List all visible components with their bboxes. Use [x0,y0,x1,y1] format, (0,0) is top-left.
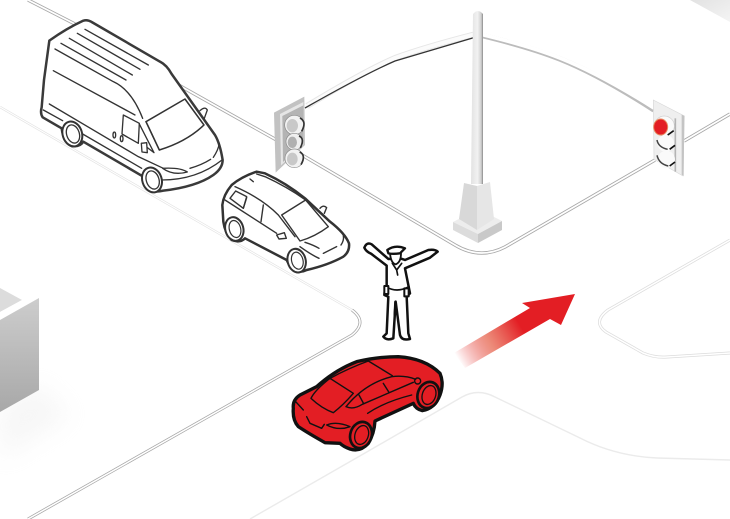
curb: right island [599,240,730,357]
signal lamp: red [654,116,674,136]
officer body [364,244,438,339]
pole shaft [471,11,483,184]
mast arm: right [480,34,654,110]
curb: lower right corner [250,392,730,519]
red car [293,357,443,451]
traffic signal: right [653,100,684,176]
officer details [384,263,409,315]
officer head and cap [387,247,405,264]
red direction arrow [454,294,575,368]
car body [222,172,349,272]
traffic officer [364,244,438,339]
traffic signal: left [274,97,305,173]
van details [43,29,222,180]
building: lower left [0,288,70,460]
mast arm: left [305,34,476,108]
van body [41,20,223,192]
car details [225,174,344,258]
van [41,20,223,195]
silver car [222,172,349,275]
curb: upper corner [28,0,730,253]
red car wheels [347,379,443,451]
pole base [453,182,502,243]
car wheels [223,215,308,275]
red car body [293,357,442,450]
curb: left corner [0,107,360,519]
van wheels [59,119,165,195]
red car details [296,361,421,428]
building: upper right [690,0,730,22]
traffic pole [305,11,654,243]
